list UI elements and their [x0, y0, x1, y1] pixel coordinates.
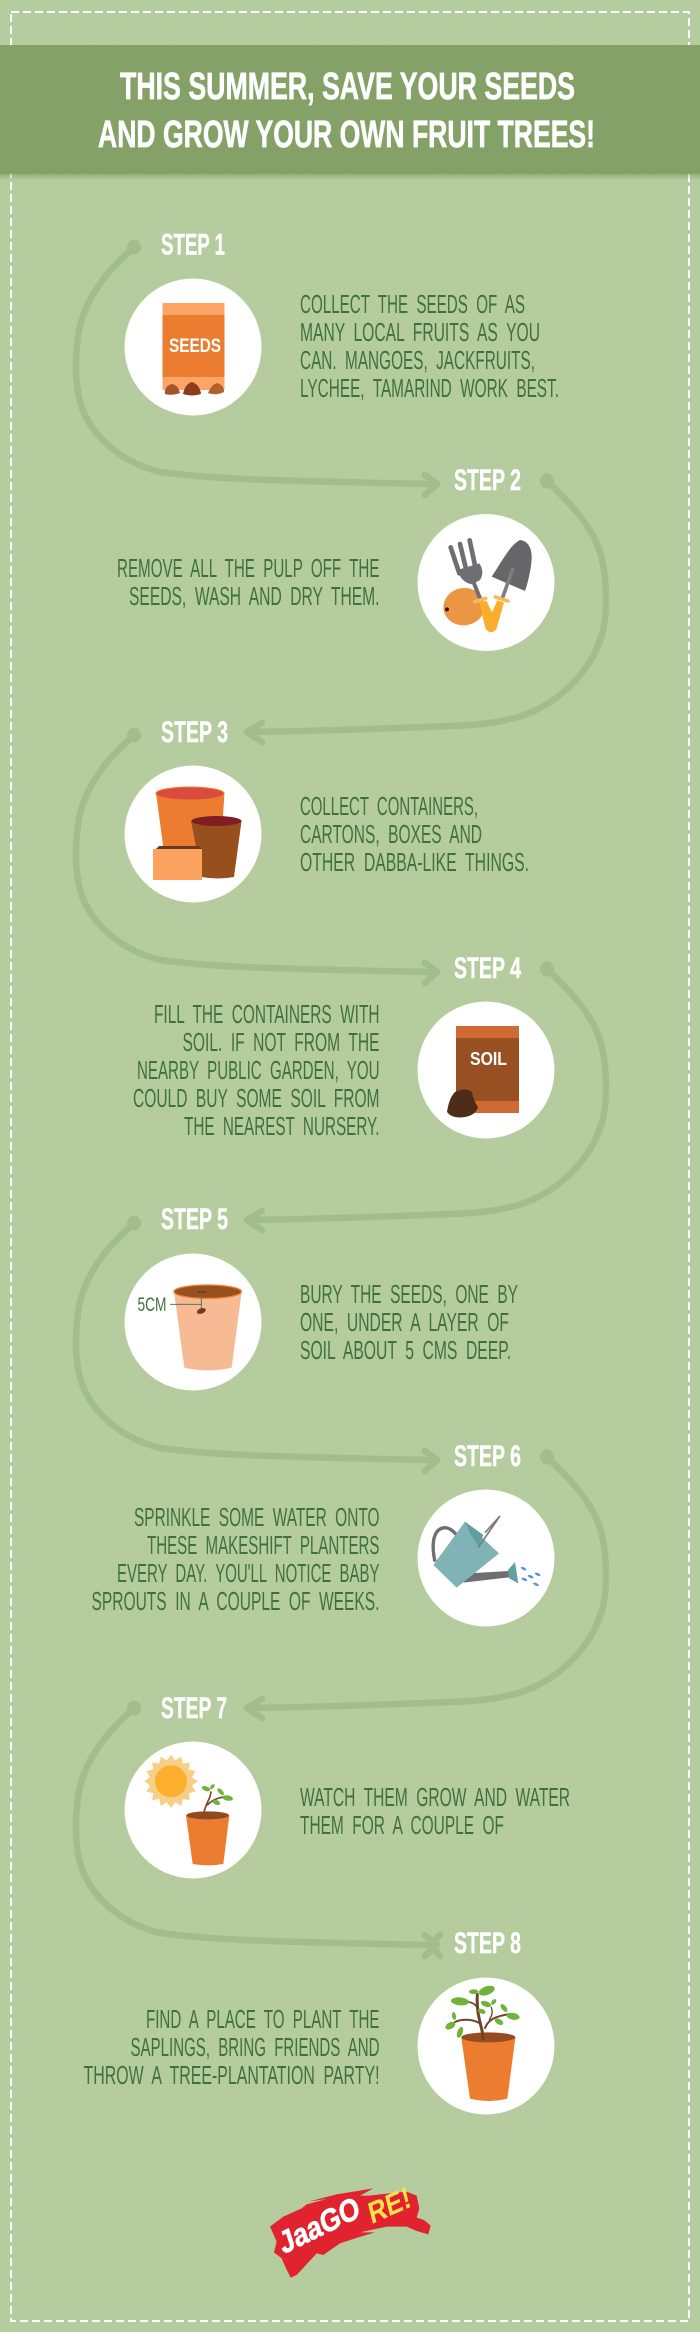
- arrow: step 1 to step 2: [76, 240, 437, 495]
- text: step 1: CAN. MANGOES, JACKFRUITS,: [300, 345, 535, 375]
- arrow: step 6 to step 7: [247, 1450, 606, 1718]
- step label: STEP 8: [454, 1927, 521, 1960]
- arrow: step 7 to step 8: [76, 1700, 440, 1956]
- step label: STEP 1: [161, 228, 225, 262]
- icon: garden tools and mango: [418, 514, 554, 651]
- panel: step 6: [92, 1440, 554, 1626]
- icon: sun and seedling: [124, 1742, 262, 1878]
- text: step 3: OTHER DABBA-LIKE THINGS.: [300, 847, 529, 877]
- icon: soil bag: [418, 1002, 554, 1138]
- arrow: step 4 to step 5: [247, 962, 606, 1230]
- panel: step 2: [117, 464, 554, 651]
- panel: step 3: [124, 716, 529, 902]
- step label: STEP 2: [454, 464, 521, 497]
- text: step 4: SOIL. IF NOT FROM THE: [182, 1027, 380, 1057]
- icon: seeds packet: SEEDS: [169, 335, 221, 357]
- text: step 2: REMOVE ALL THE PULP OFF THE: [117, 553, 380, 583]
- panel: step 8: [84, 1927, 554, 2114]
- text: step 1: [300, 289, 559, 403]
- title banner: [0, 45, 700, 180]
- text: step 2: SEEDS, WASH AND DRY THEM.: [129, 581, 380, 611]
- text: step 4: NEARBY PUBLIC GARDEN, YOU: [137, 1055, 380, 1085]
- icon: watering can: [418, 1490, 554, 1626]
- step label: STEP 7: [161, 1692, 227, 1725]
- icon: seeds packet: [124, 278, 262, 416]
- panel: step 7: [124, 1692, 570, 1878]
- text: step 1: COLLECT THE SEEDS OF AS: [300, 289, 525, 319]
- text: step 1: MANY LOCAL FRUITS AS YOU: [300, 317, 540, 347]
- arrow: step 5 to step 6: [76, 1216, 437, 1471]
- text: step 4: THE NEAREST NURSERY.: [184, 1111, 380, 1141]
- icon: containers: [124, 766, 262, 902]
- logo: Jaago Re!: JaaGO: [275, 2189, 364, 2261]
- step label: STEP 4: [454, 952, 521, 985]
- arrow: step 2 to step 3: [247, 474, 606, 742]
- arrow: step 3 to step 4: [76, 728, 437, 983]
- text: step 6: SPROUTS IN A COUPLE OF WEEKS.: [92, 1586, 380, 1616]
- logo: Jaago Re!: [270, 2181, 431, 2278]
- logo: Jaago Re!: RE!: [365, 2181, 414, 2231]
- text: step 4: [133, 999, 380, 1141]
- panel: step 4: [133, 952, 554, 1141]
- text: step 6: EVERY DAY. YOU'LL NOTICE BABY: [117, 1558, 380, 1588]
- step label: STEP 5: [161, 1203, 228, 1236]
- text: step 3: [300, 791, 529, 877]
- text: step 6: [92, 1502, 380, 1616]
- text: step 4: FILL THE CONTAINERS WITH: [154, 999, 380, 1029]
- text: step 2: [117, 553, 380, 611]
- text: step 7: THEM FOR A COUPLE OF: [300, 1810, 504, 1840]
- panel: step 1: [124, 228, 559, 416]
- step label: STEP 3: [161, 716, 228, 749]
- text: step 8: THROW A TREE-PLANTATION PARTY!: [84, 2060, 380, 2090]
- icon: soil bag: SOIL: [470, 1049, 507, 1069]
- text: step 5: ONE, UNDER A LAYER OF: [300, 1307, 509, 1337]
- text: step 5: [300, 1279, 518, 1365]
- text: step 7: [300, 1782, 570, 1840]
- text: step 8: SAPLINGS, BRING FRIENDS AND: [130, 2032, 380, 2062]
- text: step 8: FIND A PLACE TO PLANT THE: [146, 2004, 380, 2034]
- text: step 8: [84, 2004, 380, 2090]
- text: step 6: THESE MAKESHIFT PLANTERS: [147, 1530, 380, 1560]
- title: [98, 66, 595, 156]
- text: step 5: BURY THE SEEDS, ONE BY: [300, 1279, 518, 1309]
- text: step 3: CARTONS, BOXES AND: [300, 819, 482, 849]
- step label: STEP 6: [454, 1440, 521, 1473]
- icon: sapling in pot: [418, 1978, 554, 2114]
- icon: pot with buried seed: 5CM: [138, 1295, 166, 1316]
- text: step 4: COULD BUY SOME SOIL FROM: [133, 1083, 380, 1113]
- icon: pot with buried seed: [124, 1254, 262, 1390]
- text: step 6: SPRINKLE SOME WATER ONTO: [134, 1502, 380, 1532]
- panel: step 5: [124, 1203, 518, 1390]
- text: step 3: COLLECT CONTAINERS,: [300, 791, 478, 821]
- text: step 5: SOIL ABOUT 5 CMS DEEP.: [300, 1335, 511, 1365]
